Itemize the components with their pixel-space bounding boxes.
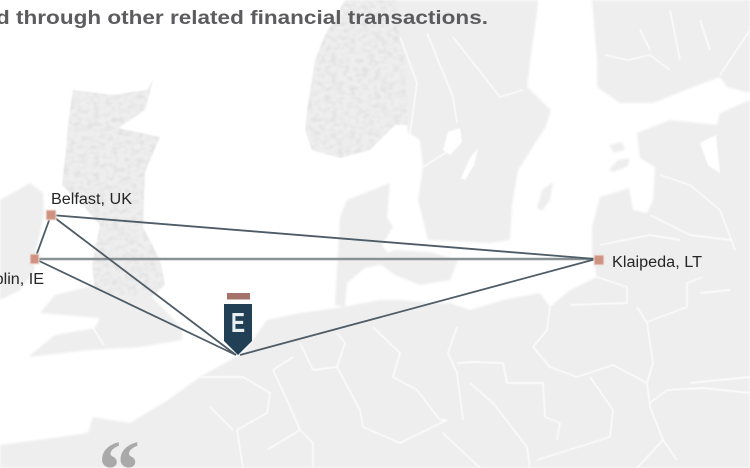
intro text: d through other related financial transactions. [0,8,488,29]
route: Dublin to headquarters [35,259,236,355]
Wales and southern England [28,285,182,357]
label: Klaipeda: Klaipeda, LT [612,254,703,271]
Sweden and eastern Norway [392,0,551,243]
route: headquarters to Klaipeda [240,259,596,355]
route: Dublin to Klaipeda [35,258,596,260]
marker: Klaipeda [594,255,604,265]
marker: Dublin [30,254,39,264]
Danish islands [372,250,458,285]
Estonia, Latvia and Russia [0,100,750,468]
Norway terrain [305,0,408,158]
Jutland [335,183,395,307]
Saaremaa [609,158,630,172]
Scotland and northern England terrain [62,80,165,298]
route network [35,215,596,355]
route: Belfast to Klaipeda [51,215,596,259]
Finland [592,0,750,103]
icon: E pin: E [231,307,245,338]
label: Belfast: Belfast, UK [51,191,133,208]
Ireland [0,183,44,300]
marker: Belfast [46,210,56,220]
Gotland [537,182,553,211]
lakes [443,128,720,180]
icon: E pin [224,293,252,355]
route: Belfast to Dublin [35,215,51,259]
Hiiumaa [609,142,625,153]
route: Belfast to headquarters [51,215,236,355]
